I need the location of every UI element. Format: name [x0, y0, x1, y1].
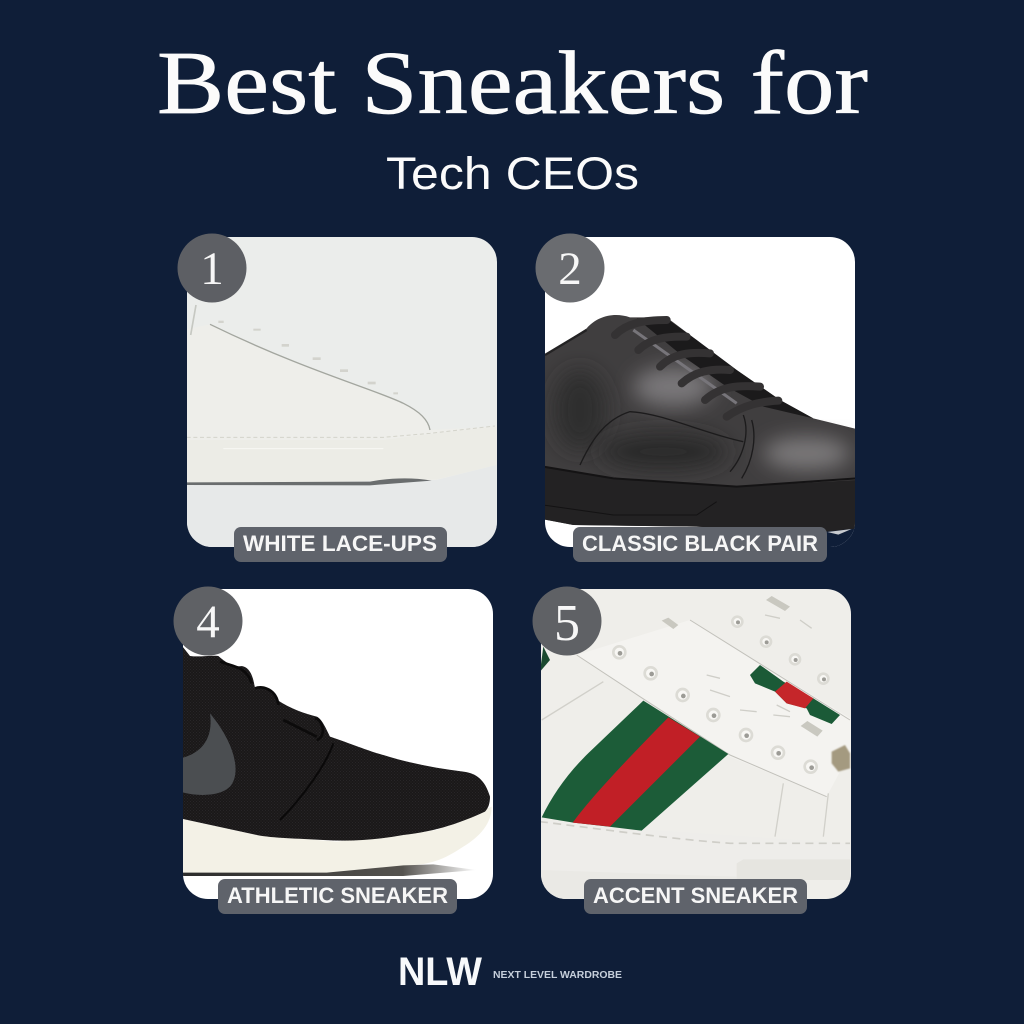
badge: number 4: [174, 586, 242, 656]
logo: NLW Next Level Wardrobe: [398, 950, 622, 994]
label: classic black pair: [573, 527, 827, 562]
label: classic black pair: CLASSIC BLACK PAIR: [582, 531, 818, 556]
badge: number 2: [536, 234, 604, 302]
label: accent sneaker: [584, 879, 807, 914]
badge: number 1: 1: [200, 243, 224, 295]
label: accent sneaker: ACCENT SNEAKER: [593, 883, 798, 908]
photo: black leather sneaker: [543, 233, 860, 550]
panel: white lace-ups: [178, 233, 500, 562]
panel: classic black pair: [536, 233, 860, 562]
label: white lace-ups: [234, 527, 447, 562]
label: white lace-ups: WHITE LACE-UPS: [243, 531, 437, 556]
photo: white sneaker with green and red stripe: [538, 587, 855, 903]
label: athletic sneaker: [218, 879, 457, 914]
badge: number 1: [178, 234, 246, 302]
badge: number 4: 4: [196, 596, 220, 648]
photo: black running sneaker: [180, 587, 497, 903]
subtitle: Tech CEOs: [386, 148, 639, 199]
label: athletic sneaker: ATHLETIC SNEAKER: [227, 883, 448, 908]
panel: accent sneaker: [532, 586, 855, 914]
badge: number 2: 2: [558, 243, 582, 295]
badge: number 5: 5: [554, 595, 580, 652]
badge: number 5: [532, 586, 602, 656]
logo: NLW Next Level Wardrobe: NEXT LEVEL WARDROBE: [493, 970, 622, 981]
photo: white sneaker: [183, 233, 500, 550]
title: Best Sneakers for: [157, 34, 868, 133]
logo: NLW Next Level Wardrobe: NLW: [398, 950, 482, 994]
panel: athletic sneaker: [174, 586, 497, 914]
